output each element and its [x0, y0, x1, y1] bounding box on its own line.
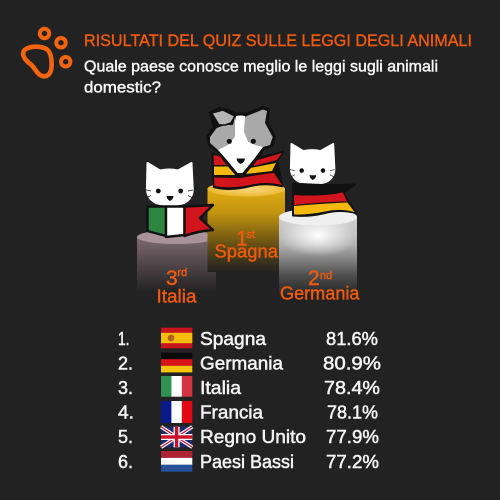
flag: France — [161, 401, 192, 423]
flag: Italian scarf — [148, 205, 213, 237]
row: Francia: 4. — [118, 403, 134, 423]
podium: second place Germania — [278, 208, 358, 297]
flag: United Kingdom — [161, 427, 192, 447]
row: Paesi Bassi: 6. — [118, 452, 133, 472]
label: third place — [156, 267, 197, 306]
flag: Netherlands — [161, 451, 192, 472]
row: Regno Unito — [118, 427, 379, 447]
label: second place — [280, 267, 360, 304]
row: Spagna: 1. — [118, 329, 130, 349]
flag: Germany — [161, 353, 192, 372]
label: first place — [214, 228, 279, 262]
row: Spagna — [118, 328, 378, 349]
label: third place: rd — [178, 267, 187, 279]
row: Paesi Bassi — [118, 451, 379, 472]
flag: Italy — [161, 376, 192, 397]
label: first place: Spagna — [214, 240, 279, 262]
dog with Spanish flag — [208, 108, 283, 189]
row: Italia: Italia — [200, 378, 242, 398]
row: Italia — [118, 376, 380, 398]
row: Paesi Bassi: Paesi Bassi — [200, 452, 294, 472]
cat with Italian flag — [146, 163, 213, 237]
row: Italia: 78.4% — [324, 378, 380, 398]
row: Germania: 2. — [118, 354, 133, 374]
title: RISULTATI DEL QUIZ SULLE LEGGI DEGLI ANIMALI — [84, 31, 472, 50]
row: Regno Unito: Regno Unito — [200, 427, 306, 447]
cat with German flag — [290, 144, 356, 216]
row: Regno Unito: 5. — [118, 427, 133, 447]
row: Germania: Germania — [200, 354, 284, 374]
row: Francia — [118, 401, 378, 423]
label: third place: Italia — [156, 286, 197, 306]
label: first place: 1 — [236, 228, 248, 250]
row: Francia: Francia — [200, 403, 264, 423]
subtitle: domestic? — [84, 80, 161, 96]
flag: Spain — [161, 328, 192, 348]
label: second place: 2 — [308, 267, 320, 290]
row: Germania — [118, 353, 381, 374]
row: Regno Unito: 77.9% — [326, 427, 379, 447]
label: second place: nd — [320, 270, 332, 282]
podium: first place Spagna — [207, 182, 285, 272]
label: second place: Germania — [280, 282, 360, 304]
label: third place: 3 — [166, 267, 178, 290]
row: Spagna: 81.6% — [326, 329, 378, 349]
ranking table — [118, 328, 381, 472]
icon: German cat — [290, 144, 335, 184]
row: Paesi Bassi: 77.2% — [326, 452, 379, 472]
icon: Italian cat — [146, 163, 193, 205]
row: Spagna: Spagna — [200, 329, 267, 349]
flag: German scarf — [293, 184, 356, 216]
label: first place: st — [246, 229, 255, 241]
icon: dog head — [208, 108, 274, 174]
icon: orange paw — [23, 29, 70, 76]
row: Germania: 80.9% — [323, 354, 381, 374]
flag: Spanish scarf — [212, 152, 283, 189]
row: Francia: 78.1% — [327, 403, 378, 423]
subtitle: Quale paese conosce meglio le leggi sugli animali — [84, 58, 438, 76]
podium: third place Italia — [137, 230, 216, 292]
row: Italia: 3. — [118, 378, 133, 398]
